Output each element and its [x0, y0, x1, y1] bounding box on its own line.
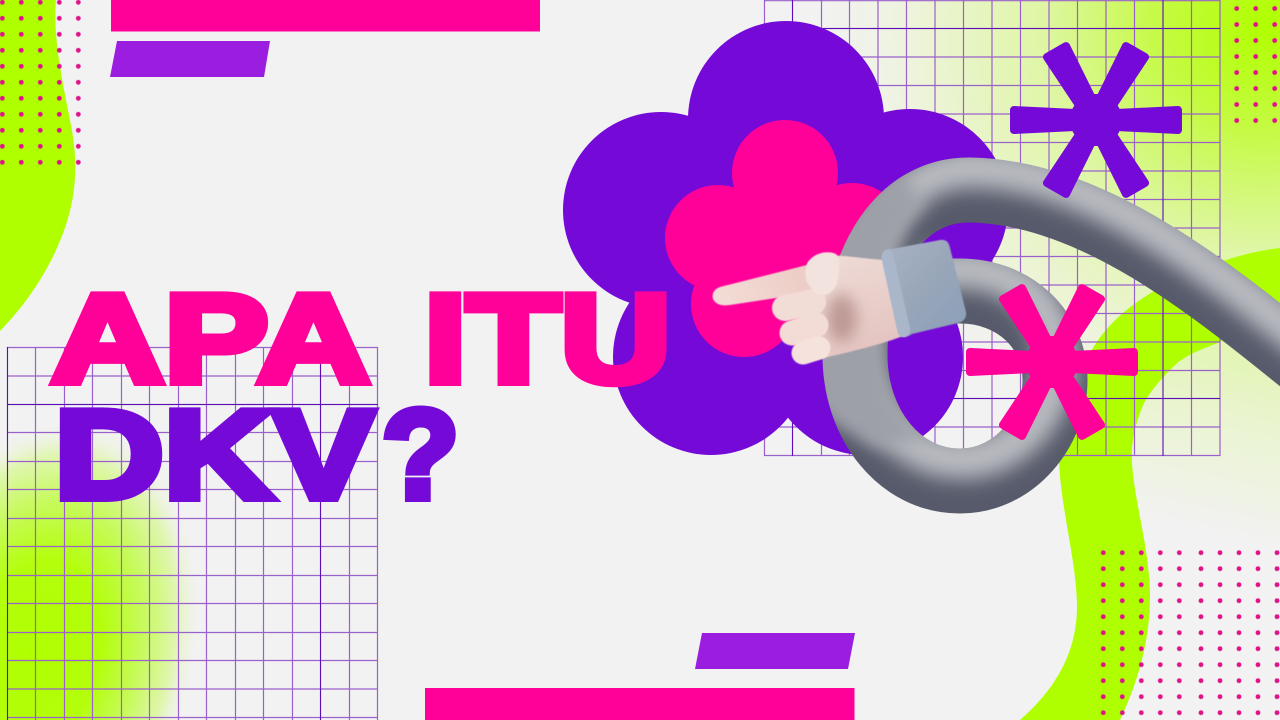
halftone dots: bottom right: [1098, 548, 1280, 720]
asterisk: pink: [970, 288, 1134, 436]
grid: bottom left: [7, 347, 378, 720]
cuff rim: [882, 249, 910, 337]
title: APA ITU: [51, 268, 671, 409]
lime glow: bottom left: [0, 400, 300, 720]
pale inner area of wave: [1120, 312, 1280, 720]
grid: top right: [764, 0, 1220, 456]
top right gradient wash: [764, 0, 1280, 470]
asterisk: purple: [1014, 46, 1178, 194]
tube: [800, 168, 1280, 481]
title: APA ITU: APA: [51, 268, 370, 409]
title: APA ITU: ITU: [424, 268, 671, 409]
title: DKV?: DKV: [54, 384, 374, 525]
bar: bottom purple: [695, 633, 855, 669]
palm shadow: [827, 294, 857, 342]
title: DKV?: ?: [382, 384, 459, 525]
lime wave: right: [1020, 248, 1280, 720]
bar: top pink: [111, 0, 540, 32]
flower: pink: [665, 120, 905, 357]
palm: [802, 256, 903, 360]
thumb: [805, 252, 839, 295]
title: DKV?: [54, 384, 459, 525]
halftone dots: top right: [1232, 0, 1280, 126]
finger three: [803, 348, 819, 353]
finger two: [792, 325, 816, 333]
finger one: [785, 302, 813, 308]
lime blob: top left: [0, 0, 75, 331]
cuff: [882, 240, 966, 337]
index finger: [713, 265, 815, 305]
icon: pointing hand: [713, 240, 966, 360]
bar: top purple: [110, 41, 270, 77]
halftone dots: top left: [0, 0, 84, 168]
bar: bottom pink: [425, 688, 854, 720]
flower: purple: [563, 21, 1008, 455]
